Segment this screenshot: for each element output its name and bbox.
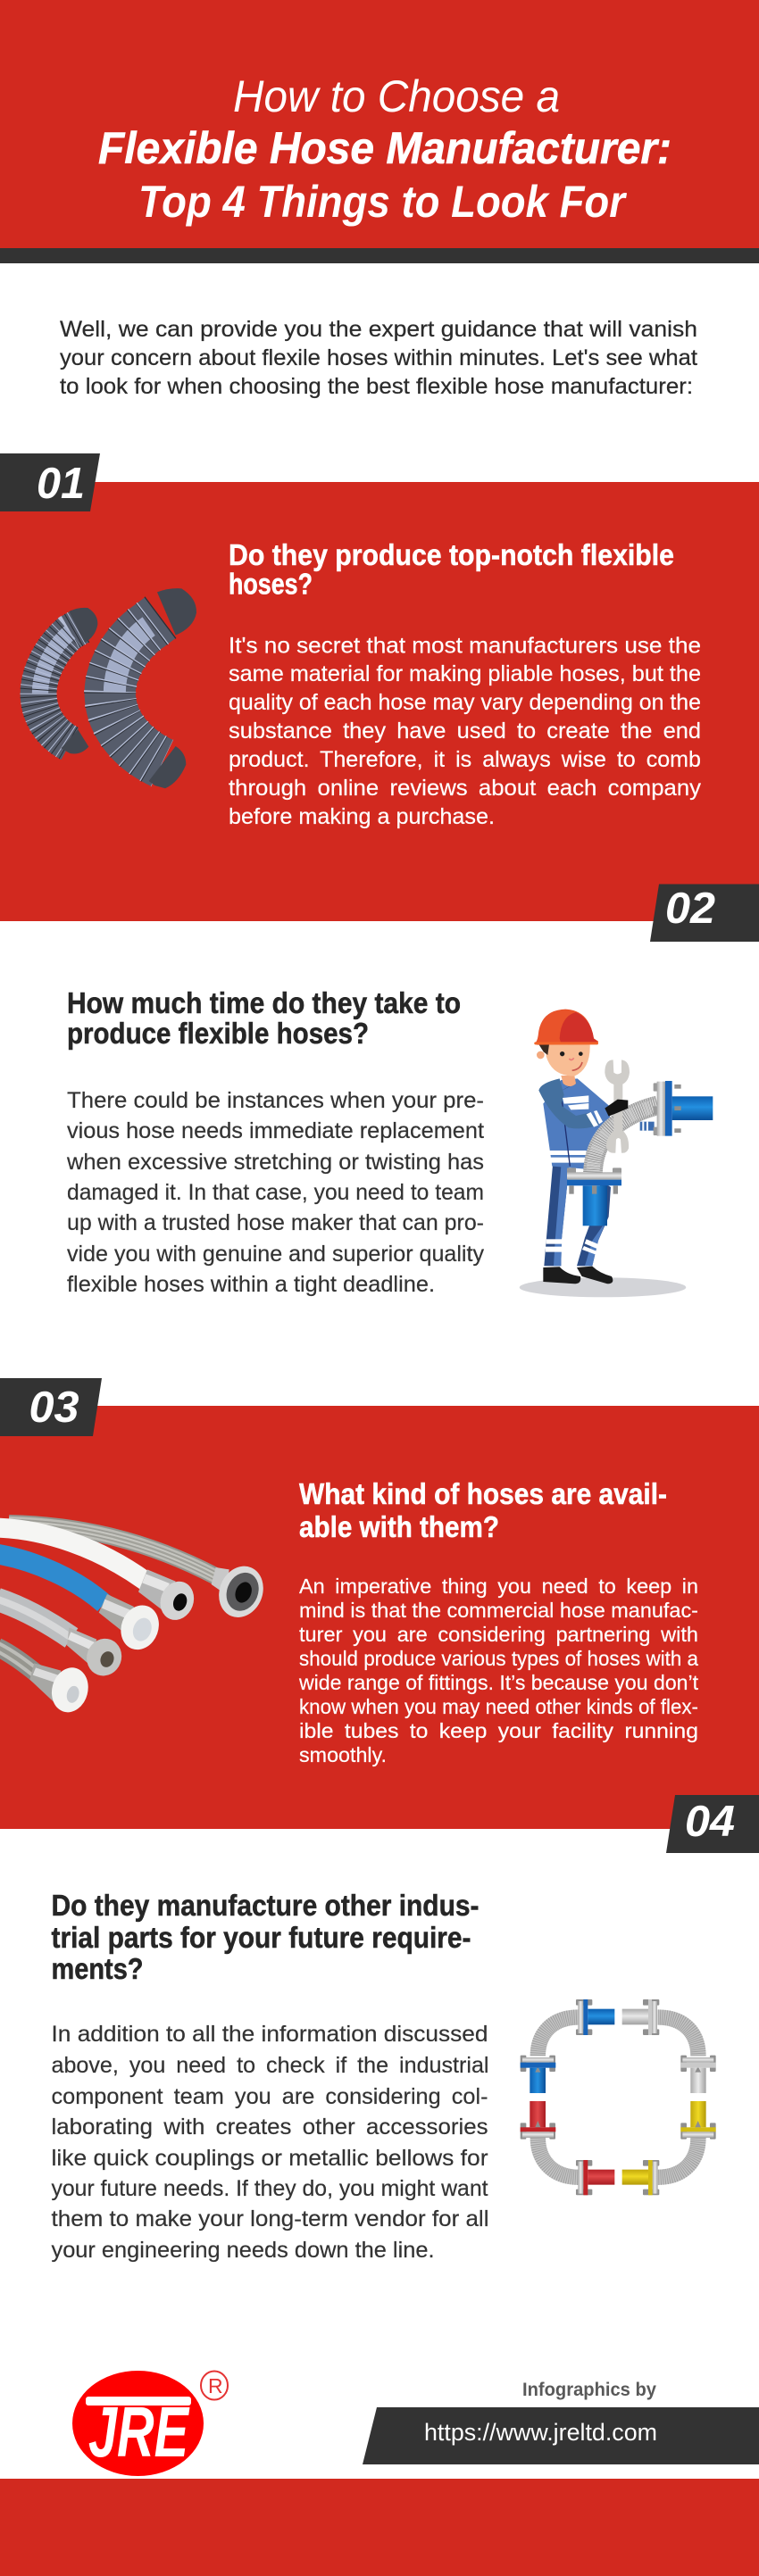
body text: damaged it. In that case, you need to team (67, 1180, 484, 1205)
badge 01: 01 (37, 460, 85, 508)
heading: Do they produce top-notch flexible (229, 538, 674, 571)
icon: braided hoses with fittings (0, 1524, 271, 1716)
heading: trial parts for your future require- (52, 1921, 471, 1954)
body text: know when you may need other kinds of flex- (299, 1695, 698, 1718)
heading (67, 986, 461, 1050)
body text: like quick couplings or metallic bellows for (52, 2146, 488, 2171)
badge 02 (650, 884, 759, 942)
title: Flexible Hose Manufacturer: (98, 123, 671, 173)
body text: turer you are considering partnering with (299, 1623, 698, 1646)
badge 04 (666, 1795, 759, 1853)
icon: corrugated hoses (38, 588, 196, 788)
header banner (0, 0, 759, 263)
heading: hoses? (229, 568, 313, 600)
heading (52, 1889, 479, 1985)
badge 02: 02 (665, 885, 715, 933)
body text: same material for making pliable hoses, but the (229, 661, 701, 686)
body text: flexible hoses within a tight deadline. (67, 1272, 435, 1297)
body text: mind is that the commercial hose manufac- (299, 1599, 698, 1622)
logo: JRE (72, 2371, 228, 2476)
title (98, 71, 671, 227)
intro text: to look for when choosing the best flexible hose manufacturer: (60, 374, 693, 399)
intro text: Well, we can provide you the expert guidance that will vanish (60, 317, 697, 342)
body text: smoothly. (299, 1743, 387, 1766)
title: Top 4 Things to Look For (138, 177, 627, 227)
intro text: your concern about flexile hoses within minutes. Let's see what (60, 345, 697, 370)
body text: An imperative thing you need to keep in (299, 1575, 698, 1598)
body text: up with a trusted hose maker that can pro- (67, 1210, 484, 1235)
body text: them to make your long-term vendor for all (52, 2206, 489, 2231)
body text: wide range of fittings. It’s because you don’t (298, 1671, 699, 1694)
panel: section 1 (0, 482, 759, 921)
body text (298, 1575, 699, 1766)
heading: What kind of hoses are avail- (299, 1477, 667, 1510)
body text: should produce various types of hoses with a (299, 1647, 698, 1670)
body text: It's no secret that most manufacturers use the (229, 634, 701, 659)
body text: your future needs. If they do, you might want (52, 2176, 488, 2201)
body text: through online reviews about each company (229, 776, 702, 801)
intro text (60, 317, 697, 399)
body text (66, 1088, 484, 1297)
body text: laborating with creates other accessories (52, 2115, 488, 2140)
body text (229, 634, 702, 829)
website bar: https://www.jreltd.com (424, 2419, 657, 2446)
badge 03: 03 (29, 1384, 79, 1432)
heading (229, 538, 674, 600)
logo: JRE: JRE (88, 2392, 190, 2472)
title: How to Choose a (233, 71, 560, 121)
heading: produce flexible hoses? (67, 1017, 369, 1050)
badge 04: 04 (685, 1798, 735, 1846)
panel: section 4 (52, 1889, 716, 2263)
panel: section 3 (0, 1406, 759, 1829)
badge 03 (0, 1378, 102, 1436)
badge 01 (0, 453, 100, 511)
footer band (0, 2479, 759, 2576)
logo: JRE: R (208, 2374, 223, 2397)
panel: section 2 (66, 986, 713, 1297)
body text: In addition to all the information discussed (52, 2022, 488, 2047)
body text: vious hose needs immediate replacement (67, 1118, 484, 1143)
heading: Do they manufacture other indus- (52, 1889, 479, 1922)
body text: substance they have used to create the end (229, 719, 701, 744)
heading: able with them? (299, 1510, 499, 1543)
body text: ible tubes to keep your facility running (299, 1719, 698, 1742)
body text (52, 2022, 489, 2263)
body text: your engineering needs down the line. (52, 2238, 435, 2263)
heading: ments? (52, 1952, 143, 1985)
body text: component team you are considering col- (52, 2084, 488, 2109)
heading (299, 1477, 667, 1543)
body text: vide you with genuine and superior quality (67, 1242, 484, 1267)
body text: when excessive stretching or twisting has (66, 1150, 484, 1175)
icon: ring of coloured pipes (521, 1999, 716, 2195)
body text: product. Therefore, it is always wise to comb (229, 747, 701, 772)
body text: above, you need to check if the industrial (52, 2053, 489, 2078)
heading: How much time do they take to (67, 986, 461, 1019)
body text: before making a purchase. (229, 804, 495, 829)
body text: quality of each hose may vary depending on the (229, 690, 701, 715)
icon: worker holding hose (520, 1010, 713, 1297)
website bar (363, 2407, 759, 2464)
credit label: Infographics by (522, 2380, 656, 2400)
body text: There could be instances when your pre- (67, 1088, 484, 1113)
